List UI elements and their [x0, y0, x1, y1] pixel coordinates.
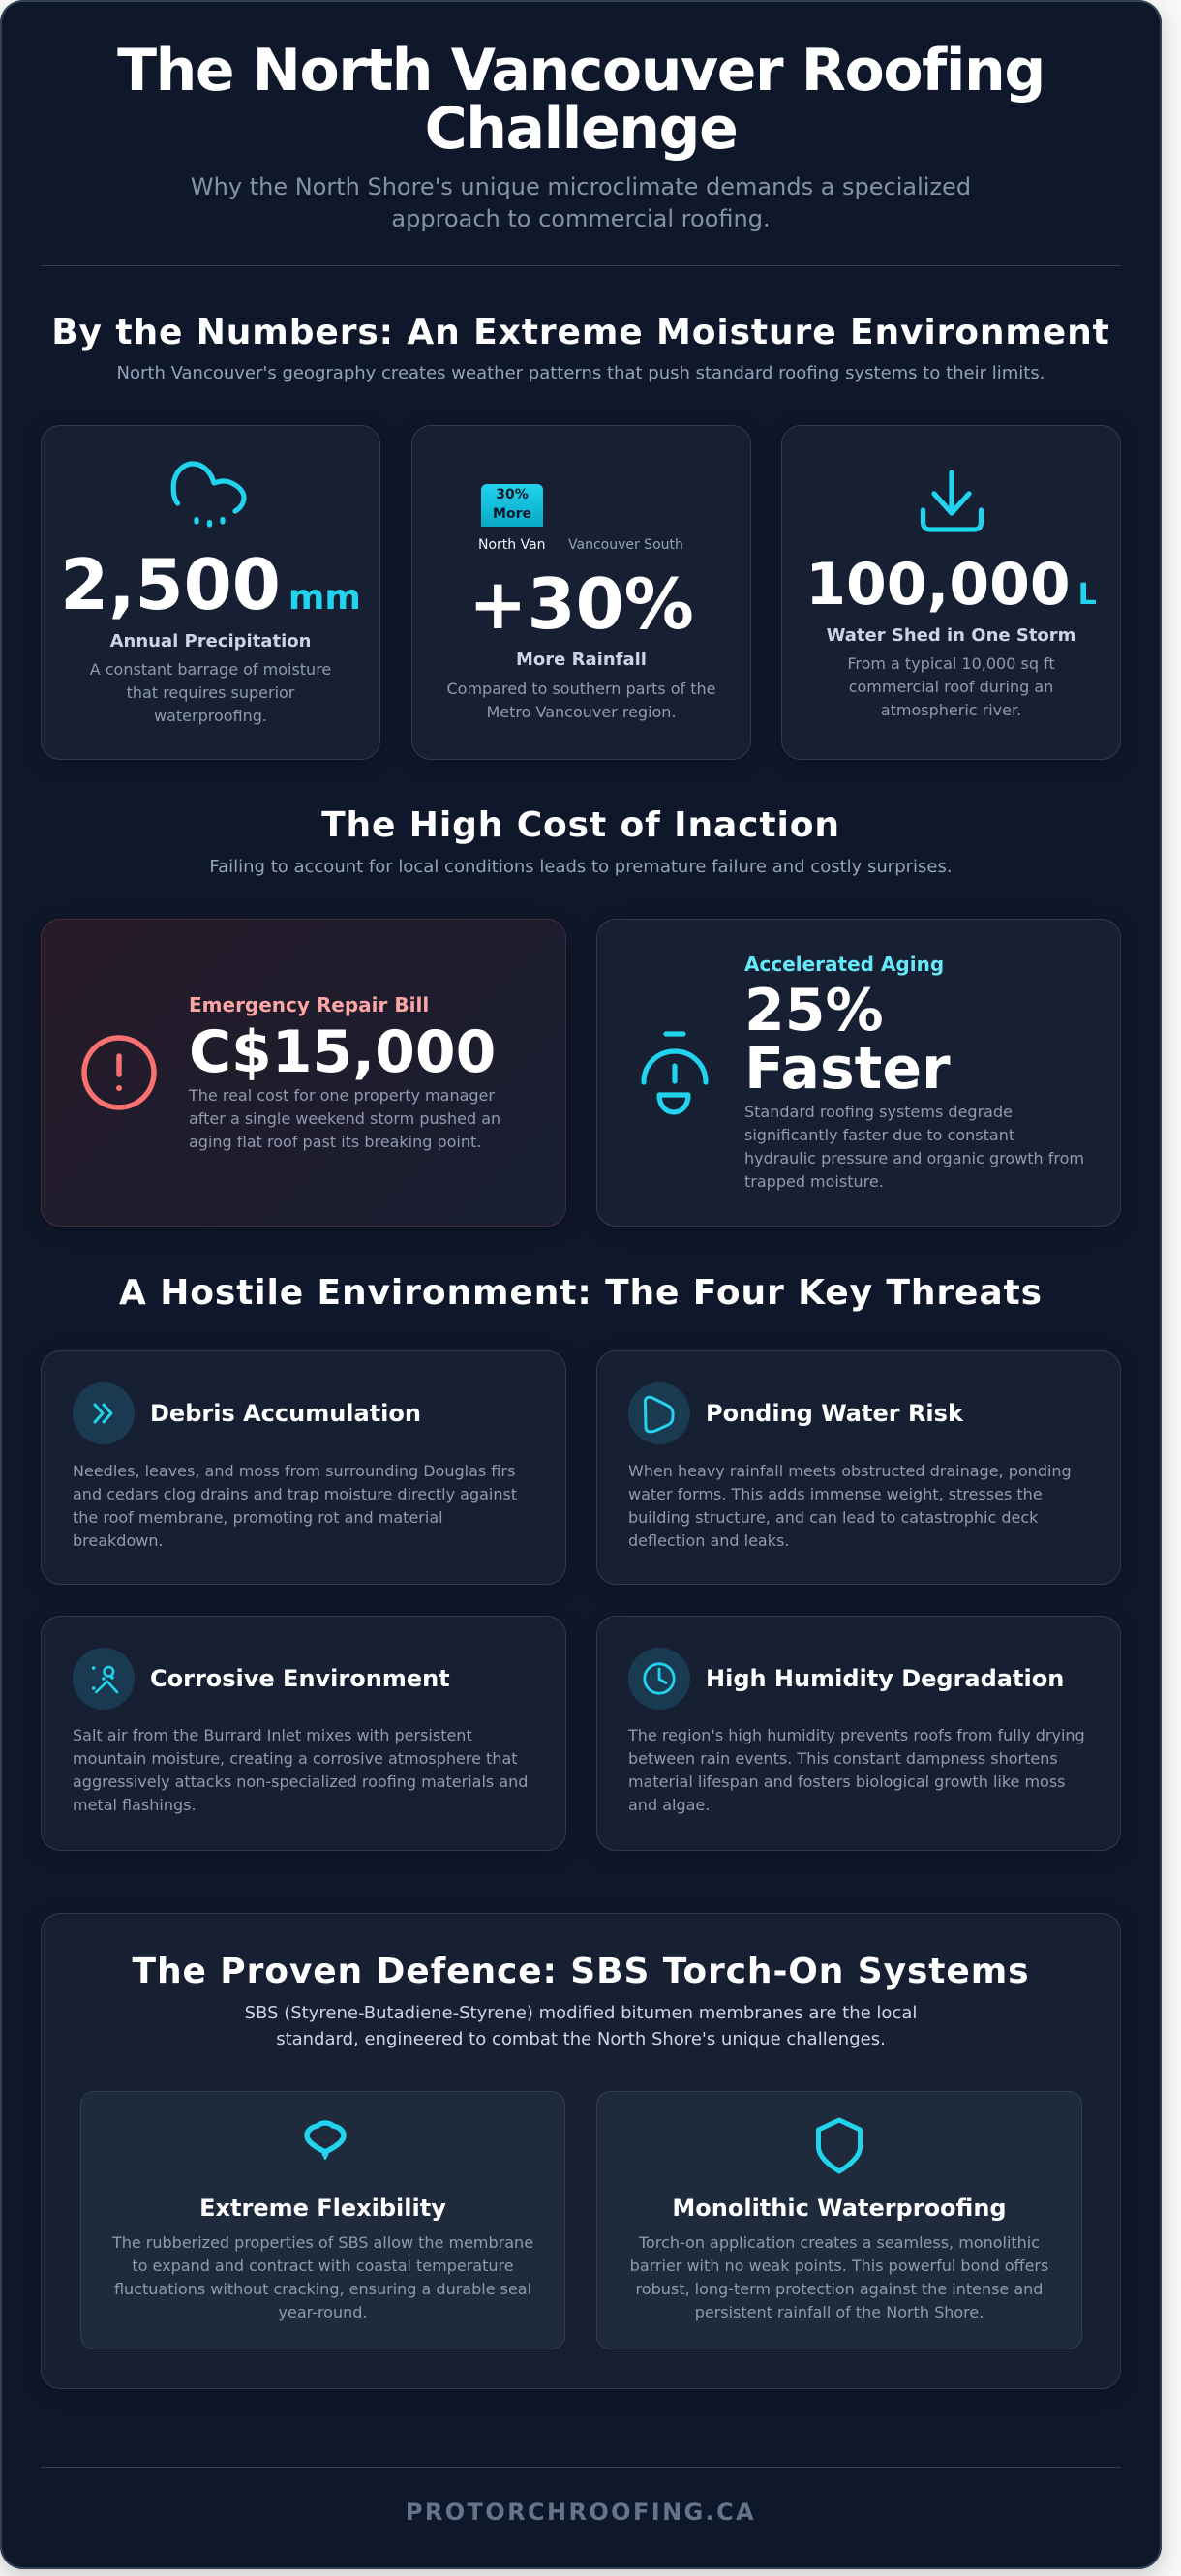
icon: corrosive air — [73, 1648, 135, 1710]
aging description: Standard roofing systems degrade — [744, 1103, 1013, 1121]
section intro: cost of inaction: Failing to account for local conditions leads to premature failure and costly surprises. — [209, 857, 953, 877]
threat description: When heavy rainfall meets obstructed drainage, ponding — [628, 1462, 1072, 1480]
stat value: 2,500 mm: 2,500mm — [60, 544, 361, 625]
threat description: The region's high humidity prevents roofs from fully drying — [628, 1726, 1085, 1744]
feature description: The rubberized properties of SBS allow the membrane — [112, 2233, 533, 2252]
subtitle — [191, 173, 971, 232]
threat description: material lifespan and fosters biological growth like moss — [628, 1773, 1065, 1791]
stat description — [446, 680, 716, 721]
title: Challenge — [425, 95, 737, 163]
icon: double chevron — [73, 1382, 135, 1444]
stat description: commercial roof during an — [849, 678, 1053, 696]
stat label: More Rainfall — [516, 650, 647, 670]
threat description: building structure, and can lead to catastrophic deck — [628, 1508, 1038, 1527]
icon: alert circle — [81, 1035, 157, 1110]
bar: north van: 30% — [496, 487, 529, 502]
subtitle: approach to commercial roofing. — [391, 205, 771, 232]
icon: clock — [628, 1648, 690, 1710]
stat value: +30%: +30% — [469, 563, 694, 645]
feature description — [112, 2233, 533, 2321]
panel intro: SBS (Styrene-Butadiene-Styrene) modified bitumen membranes are the local — [245, 2003, 917, 2023]
feature title: Extreme Flexibility — [199, 2195, 446, 2222]
stat card: more rainfall — [411, 425, 751, 760]
stat label: Annual Precipitation — [110, 631, 311, 652]
threat description: aggressively attacks non-specialized roofing materials and — [73, 1773, 528, 1791]
bar chart: rainfall comparison — [478, 484, 683, 553]
threat card: debris — [41, 1350, 566, 1585]
bar: north van — [481, 484, 543, 527]
stat description: that requires superior — [127, 683, 294, 702]
footer brand: PROTORCHROOFING.CA — [406, 2499, 756, 2526]
stat label: Water Shed in One Storm — [827, 625, 1075, 646]
stat description: atmospheric river. — [881, 701, 1021, 719]
threat title: Debris Accumulation — [150, 1400, 421, 1427]
icon: flexible membrane — [304, 2120, 347, 2160]
threat description: water forms. This adds immense weight, stresses the — [628, 1485, 1043, 1503]
title — [117, 37, 1045, 163]
icon: ponding shape — [628, 1382, 690, 1444]
threat description: deflection and leaks. — [628, 1531, 789, 1550]
threat description: mountain moisture, creating a corrosive atmosphere that — [73, 1749, 518, 1768]
stat description: Metro Vancouver region. — [486, 703, 677, 721]
panel: SBS systems — [41, 1913, 1121, 2389]
icon: download tray — [920, 470, 984, 532]
title: The North Vancouver Roofing — [117, 37, 1045, 105]
threat description: Needles, leaves, and moss from surrounding Douglas firs — [73, 1462, 515, 1480]
panel intro: standard, engineered to combat the North Shore's unique challenges. — [276, 2029, 886, 2049]
feature description: robust, long-term protection against the intense and — [636, 2280, 1043, 2298]
threat description — [73, 1462, 517, 1550]
threat description: Salt air from the Burrard Inlet mixes with persistent — [73, 1726, 472, 1744]
stat description: Compared to southern parts of the — [446, 680, 716, 698]
feature description: barrier with no weak points. This powerful bond offers — [630, 2257, 1048, 2275]
feature card: flexibility — [80, 2091, 565, 2349]
threat description: breakdown. — [73, 1531, 164, 1550]
cost description: aging flat roof past its breaking point. — [189, 1133, 481, 1151]
threat description — [73, 1726, 528, 1814]
bar label: north van: North Van — [478, 537, 546, 553]
cost description: The real cost for one property manager — [189, 1086, 495, 1105]
aging value — [744, 977, 951, 1103]
cost card: accelerated aging — [596, 919, 1121, 1227]
icon: shield — [816, 2118, 863, 2174]
cost card: emergency repair — [41, 919, 566, 1227]
stat card: annual precipitation — [41, 425, 380, 760]
threat description: and cedars clog drains and trap moisture directly against — [73, 1485, 517, 1503]
heading: four threats: A Hostile Environment: The Four Key Threats — [119, 1273, 1043, 1313]
threat description: and algae. — [628, 1796, 710, 1814]
stat description: waterproofing. — [154, 707, 267, 725]
feature description — [630, 2233, 1048, 2321]
threat card: corrosive — [41, 1616, 566, 1851]
threat card: humidity — [596, 1616, 1121, 1851]
threat description — [627, 1726, 1085, 1814]
stat value: 100,000 L: 100,000 L — [805, 551, 1097, 619]
feature title: Monolithic Waterproofing — [672, 2195, 1007, 2222]
stat description: A constant barrage of moisture — [90, 660, 331, 679]
stat card: water shed — [781, 425, 1121, 760]
stat description: From a typical 10,000 sq ft — [847, 654, 1055, 673]
aging value: Faster — [744, 1035, 951, 1103]
stat description — [90, 660, 331, 725]
panel heading: The Proven Defence: SBS Torch-On Systems — [133, 1952, 1029, 1991]
aging value: 25% — [744, 977, 884, 1045]
cost description — [188, 1086, 500, 1151]
cost description: after a single weekend storm pushed an — [189, 1109, 500, 1128]
threat description: metal flashings. — [73, 1796, 197, 1814]
aging description: significantly faster due to constant — [744, 1126, 1014, 1144]
bar: north van: More — [493, 506, 531, 522]
feature description: to expand and contract with coastal temperature — [132, 2257, 514, 2275]
card kicker: Emergency Repair Bill — [189, 993, 429, 1016]
feature description: Torch-on application creates a seamless, monolithic — [639, 2233, 1040, 2252]
feature description: fluctuations without cracking, ensuring a durable seal — [114, 2280, 531, 2298]
panel intro — [245, 2003, 917, 2049]
threat card: ponding — [596, 1350, 1121, 1585]
threat title: Ponding Water Risk — [706, 1400, 963, 1427]
card kicker: Accelerated Aging — [744, 953, 944, 976]
cost value: C$15,000 — [189, 1018, 496, 1086]
icon: aging gauge — [641, 1031, 709, 1115]
threat description: between rain events. This constant dampness shortens — [628, 1749, 1058, 1768]
subtitle: Why the North Shore's unique microclimate demands a specialized — [191, 173, 971, 200]
section intro: by the numbers: North Vancouver's geography creates weather patterns that push standard roofing systems to their limits. — [117, 363, 1045, 383]
heading: by the numbers: By the Numbers: An Extreme Moisture Environment — [51, 313, 1110, 352]
threat title: Corrosive Environment — [150, 1665, 450, 1692]
feature description: persistent rainfall of the North Shore. — [695, 2303, 984, 2321]
aging description: hydraulic pressure and organic growth from — [744, 1149, 1084, 1167]
icon: rain cloud — [170, 461, 247, 528]
aging description: trapped moisture. — [744, 1172, 884, 1191]
threat description: the roof membrane, promoting rot and material — [73, 1508, 443, 1527]
feature description: year-round. — [279, 2303, 367, 2321]
aging description — [744, 1103, 1084, 1191]
bar label: vancouver south: Vancouver South — [568, 537, 683, 553]
heading: cost of inaction: The High Cost of Inaction — [321, 805, 840, 845]
threat description — [628, 1462, 1072, 1550]
feature card: waterproofing — [596, 2091, 1082, 2349]
stat description — [847, 654, 1055, 719]
threat title: High Humidity Degradation — [706, 1665, 1064, 1692]
